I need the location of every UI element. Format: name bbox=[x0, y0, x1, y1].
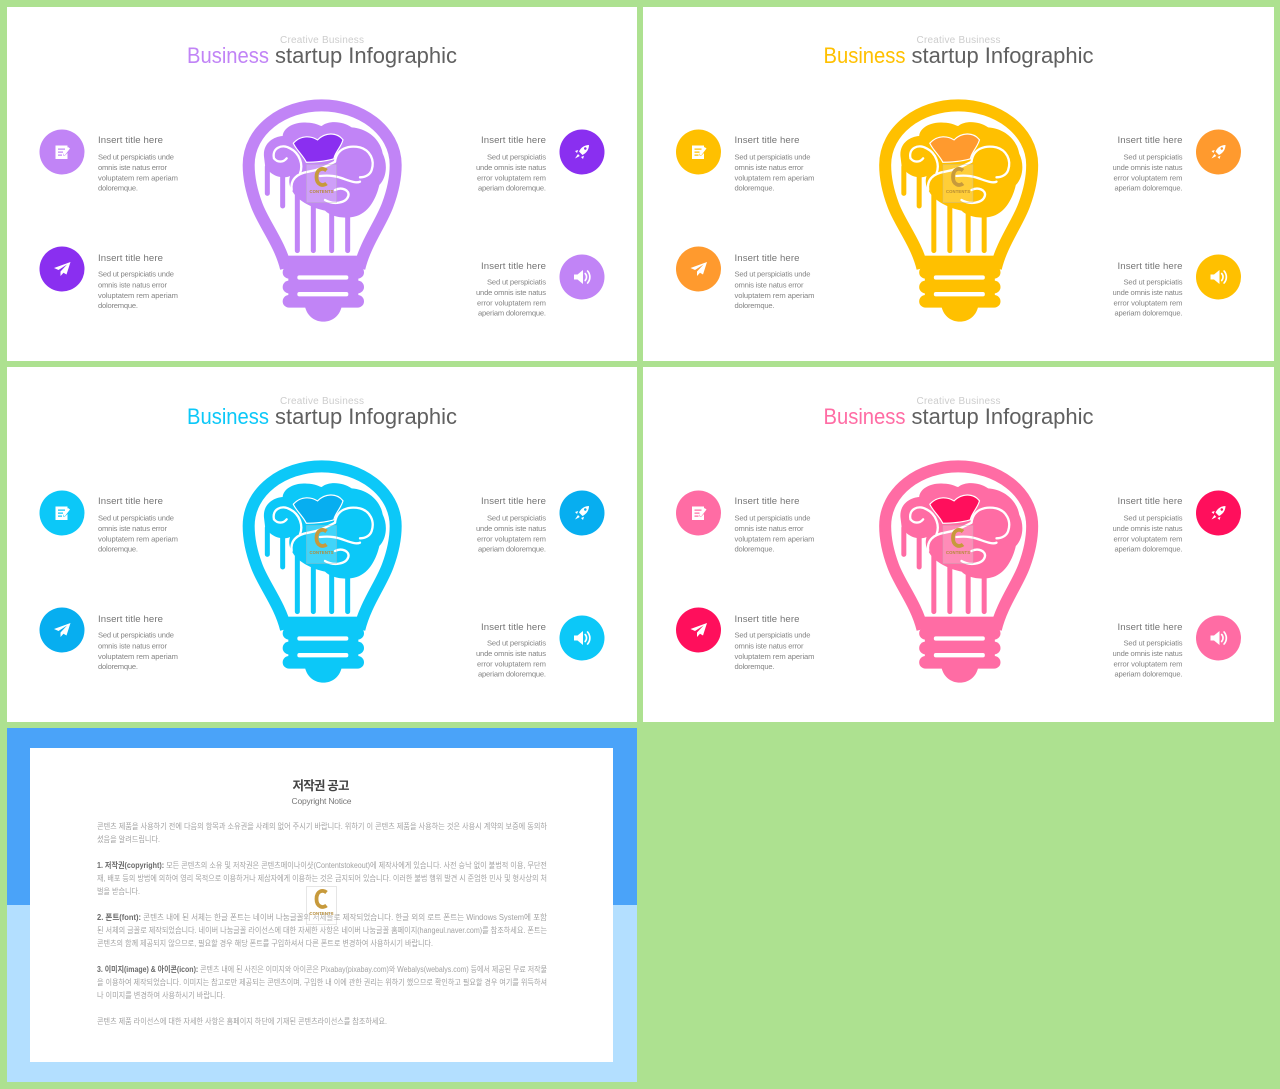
text block: top right: Sed ut perspiciatis bbox=[1124, 514, 1183, 522]
icon: note bbox=[40, 130, 84, 174]
text block: bottom left: omnis iste natus error bbox=[734, 642, 804, 650]
text block: top right: Sed ut perspiciatis bbox=[487, 514, 546, 522]
text block: bottom right bbox=[1112, 261, 1183, 318]
heading: Business bbox=[187, 404, 269, 429]
text block: bottom right: Sed ut perspiciatis bbox=[487, 638, 546, 648]
watermark logo bbox=[306, 164, 336, 202]
text block: bottom right: error voluptatem rem bbox=[477, 660, 546, 668]
text block: bottom left: Insert title here bbox=[98, 253, 163, 264]
icon: paper plane bbox=[676, 246, 721, 292]
overline: Creative Business bbox=[280, 396, 364, 407]
heading bbox=[187, 43, 457, 68]
notice intro: 셨음을 알려드립니다. bbox=[97, 834, 160, 844]
heading: Business bbox=[187, 43, 269, 68]
text block: top right: aperiam doloremque. bbox=[1114, 184, 1182, 192]
watermark logo: CONTENTS bbox=[946, 550, 970, 555]
notice section: font: 된 서체의 글꼴로 제작되었습니다. 네이버 나눔글꼴 라이선스에 대한 자세한 사항은 네이버 나눔글꼴 홈페이지(hangeul.naver.com)를 참조하세요. 폰트는 bbox=[97, 925, 547, 935]
icon: note bbox=[676, 490, 721, 536]
text block: bottom right: Insert title here bbox=[1118, 622, 1182, 633]
heading: startup Infographic bbox=[912, 404, 1094, 429]
text block: top left: Sed ut perspiciatis unde bbox=[734, 514, 810, 522]
text block: bottom left: voluptatem rem aperiam bbox=[734, 291, 814, 300]
text block: bottom left: Insert title here bbox=[98, 614, 163, 625]
icon: paper plane bbox=[40, 246, 84, 292]
text block: top left: doloremque. bbox=[98, 184, 138, 192]
watermark logo: CONTENTS bbox=[310, 189, 334, 194]
text block: bottom right: Sed ut perspiciatis bbox=[487, 278, 546, 286]
text block: bottom right: error voluptatem rem bbox=[1114, 660, 1182, 668]
text block: bottom right: Sed ut perspiciatis bbox=[1124, 638, 1183, 648]
text block: top left: voluptatem rem aperiam bbox=[734, 174, 814, 182]
text block: bottom left bbox=[734, 614, 814, 671]
icon: rocket bbox=[1196, 130, 1241, 174]
text block: bottom left: voluptatem rem aperiam bbox=[98, 291, 178, 300]
text block: top left bbox=[734, 135, 814, 192]
text block: top left: voluptatem rem aperiam bbox=[98, 534, 178, 544]
panel: pink slide bbox=[643, 367, 1274, 722]
text block: bottom right: unde omnis iste natus bbox=[476, 288, 546, 297]
notice section: copyright bbox=[97, 860, 547, 896]
notice section: font bbox=[97, 912, 548, 948]
icon: lightbulb with brain bbox=[249, 466, 396, 683]
text block: bottom left: omnis iste natus error bbox=[98, 280, 167, 290]
heading: startup Infographic bbox=[275, 404, 457, 429]
text block: bottom left: Insert title here bbox=[734, 614, 800, 625]
icon: speaker bbox=[1196, 254, 1241, 300]
heading: Business bbox=[824, 43, 906, 68]
panel: yellow slide bbox=[643, 7, 1274, 361]
text block: top right bbox=[476, 496, 546, 554]
text block: top left: Insert title here bbox=[734, 135, 800, 146]
notice intro: 콘텐츠 제품을 사용하기 전에 다음의 항목과 소유권을 사례의 없어 주시기 바랍니다. 위하기 이 콘텐츠 제품을 사용하는 것은 사용시 계약의 보증에 동의하 bbox=[97, 821, 548, 831]
text block: bottom right: Insert title here bbox=[481, 622, 546, 633]
watermark logo bbox=[306, 526, 336, 564]
notice footer: 콘텐츠 제품 라이선스에 대한 자세한 사항은 홈페이지 하단에 기재된 콘텐츠라이선스를 참조하세요. bbox=[97, 1016, 387, 1026]
heading: startup Infographic bbox=[275, 43, 457, 68]
icon: speaker bbox=[1196, 616, 1241, 660]
notice section: image and icon: 3. 이미지(image) & 아이콘(icon): 콘텐츠 내에 된 사진은 이미지와 아이콘은 Pixabay(pixabay.com)와 Webalys(webalys.com) 등에서 제공된 무료 저작물 bbox=[97, 964, 547, 974]
text block: top left: Sed ut perspiciatis unde bbox=[98, 514, 174, 522]
text block: top right: Insert title here bbox=[1118, 135, 1182, 146]
text block: bottom left: doloremque. bbox=[734, 301, 774, 310]
icon: rocket bbox=[560, 490, 604, 536]
text block: top right: aperiam doloremque. bbox=[478, 544, 546, 554]
text block: bottom left: omnis iste natus error bbox=[98, 642, 167, 650]
text block: bottom left: doloremque. bbox=[98, 301, 138, 310]
text block: top left bbox=[98, 496, 178, 554]
text block: top left bbox=[734, 496, 814, 554]
text block: bottom right: aperiam doloremque. bbox=[1114, 308, 1182, 318]
notice section: image and icon: 을 이용하여 제작되었습니다. 이미지는 참고로만 제공되는 콘텐츠이며, 구입한 내 이에 관한 권리는 위하기 했으므로 확인하고 필요할 경우 여기를 위득하셔 bbox=[97, 977, 547, 987]
watermark logo: CONTENTS bbox=[946, 189, 970, 194]
text block: bottom left: Sed ut perspiciatis unde bbox=[98, 630, 174, 640]
icon: note bbox=[676, 130, 721, 174]
text block: top left: doloremque. bbox=[734, 544, 774, 554]
icon: lightbulb with brain bbox=[885, 466, 1032, 683]
text block: top right: Insert title here bbox=[481, 496, 546, 507]
text block: bottom right: unde omnis iste natus bbox=[476, 649, 546, 658]
text block: top right bbox=[1112, 135, 1183, 192]
text block: bottom left bbox=[98, 253, 178, 310]
text block: top right bbox=[1112, 496, 1183, 554]
text block: top left: doloremque. bbox=[734, 184, 774, 192]
text block: top left: Insert title here bbox=[98, 496, 163, 507]
notice section: font: 2. 폰트(font): 콘텐츠 내에 된 서체는 한글 폰트는 네이버 나눔글꼴의 서체들로 제작되었습니다. 한글 외의 로트 폰트는 Windows System에 포함 bbox=[97, 912, 548, 922]
text block: top left: Insert title here bbox=[98, 135, 163, 146]
text block: bottom left: voluptatem rem aperiam bbox=[98, 652, 178, 661]
icon: lightbulb with brain bbox=[885, 105, 1032, 322]
notice section: copyright: 재, 배포 등의 방법에 의하여 영리 목적으로 이용하거나 제삼자에게 이용하는 것은 금지되어 있습니다. 이러한 불법 행위 발견 시 준엄한 민사 및 형사상의 처 bbox=[97, 873, 547, 883]
heading bbox=[187, 404, 457, 429]
text block: top right: aperiam doloremque. bbox=[1114, 544, 1182, 554]
text block: bottom left: doloremque. bbox=[734, 662, 774, 671]
text block: top right: Sed ut perspiciatis bbox=[1124, 152, 1183, 162]
text block: bottom right bbox=[476, 622, 546, 678]
text block: top left: omnis iste natus error bbox=[734, 163, 804, 172]
text block: bottom right: aperiam doloremque. bbox=[1114, 670, 1182, 678]
overline: Creative Business bbox=[916, 35, 1000, 46]
text block: bottom right: error voluptatem rem bbox=[1114, 298, 1182, 308]
watermark logo bbox=[306, 886, 336, 924]
text block: top left: doloremque. bbox=[98, 544, 138, 554]
icon: rocket bbox=[1196, 490, 1241, 536]
panel: copyright notice bbox=[7, 728, 637, 1082]
text block: top left: voluptatem rem aperiam bbox=[98, 174, 178, 182]
text block: top left: omnis iste natus error bbox=[98, 524, 167, 533]
text block: bottom left bbox=[734, 253, 814, 310]
text block: top right: unde omnis iste natus bbox=[1112, 524, 1183, 533]
text block: top right: Sed ut perspiciatis bbox=[487, 152, 546, 162]
text block: bottom left bbox=[98, 614, 178, 671]
text block: top right: error voluptatem rem bbox=[1114, 534, 1182, 544]
text block: bottom right bbox=[476, 261, 546, 318]
text block: bottom right: error voluptatem rem bbox=[477, 298, 546, 308]
text block: top right: unde omnis iste natus bbox=[476, 163, 546, 172]
heading bbox=[824, 404, 1094, 429]
text block: top right bbox=[476, 135, 546, 192]
text block: bottom left: Sed ut perspiciatis unde bbox=[734, 630, 810, 640]
icon: speaker bbox=[560, 616, 604, 660]
text block: top left: Sed ut perspiciatis unde bbox=[734, 152, 810, 162]
text block: top left: omnis iste natus error bbox=[98, 163, 167, 172]
text block: top left bbox=[98, 135, 178, 192]
notice title: 저작권 공고 bbox=[292, 778, 350, 793]
text block: bottom right: unde omnis iste natus bbox=[1112, 649, 1183, 658]
text block: top right: error voluptatem rem bbox=[477, 174, 546, 182]
icon: paper plane bbox=[40, 608, 84, 652]
text block: bottom right bbox=[1112, 622, 1183, 678]
text block: bottom right: Insert title here bbox=[1118, 261, 1182, 272]
text block: bottom right: unde omnis iste natus bbox=[1112, 288, 1183, 297]
notice intro bbox=[97, 821, 548, 844]
notice subtitle: Copyright Notice bbox=[292, 796, 352, 806]
text block: top right: unde omnis iste natus bbox=[1112, 163, 1183, 172]
watermark logo bbox=[943, 164, 973, 202]
text block: top right: Insert title here bbox=[481, 135, 546, 146]
notice section: font: 콘텐츠의 함께 제공되지 않으므로, 필요할 경우 해당 폰트를 구입하셔서 다른 폰트로 변경하여 사용하시기 바랍니다. bbox=[97, 938, 433, 948]
text block: bottom right: Sed ut perspiciatis bbox=[1124, 278, 1183, 286]
text block: top left: voluptatem rem aperiam bbox=[734, 534, 814, 544]
text block: bottom right: aperiam doloremque. bbox=[478, 308, 546, 318]
text block: bottom left: Sed ut perspiciatis unde bbox=[98, 270, 174, 278]
text block: bottom right: Insert title here bbox=[481, 261, 546, 272]
text block: top right: aperiam doloremque. bbox=[478, 184, 546, 192]
watermark logo: CONTENTS bbox=[310, 550, 334, 555]
text block: top left: Sed ut perspiciatis unde bbox=[98, 152, 174, 162]
text block: top right: error voluptatem rem bbox=[477, 534, 546, 544]
text block: bottom left: omnis iste natus error bbox=[734, 280, 804, 290]
notice section: image and icon: 나 이미지를 변경하여 사용하시기 바랍니다. bbox=[97, 990, 225, 1000]
icon: lightbulb with brain bbox=[249, 105, 396, 322]
text block: top left: omnis iste natus error bbox=[734, 524, 804, 533]
heading: startup Infographic bbox=[912, 43, 1094, 68]
watermark logo: CONTENTS bbox=[310, 911, 334, 916]
text block: top left: Insert title here bbox=[734, 496, 800, 507]
overline: Creative Business bbox=[916, 396, 1000, 407]
icon: speaker bbox=[560, 254, 604, 300]
icon: paper plane bbox=[676, 608, 721, 652]
heading bbox=[824, 43, 1094, 68]
text block: bottom left: voluptatem rem aperiam bbox=[734, 652, 814, 661]
icon: note bbox=[40, 490, 84, 536]
notice section: copyright: 1. 저작권(copyright): 모든 콘텐츠의 소유 및 저작권은 콘텐츠메이나이샷(Contentstokeout)에 제작사에게 있습니다. 사전 승낙 없이 불법적 이용, 무단전 bbox=[97, 860, 547, 870]
watermark logo bbox=[943, 526, 973, 564]
notice section: copyright: 벌을 받습니다. bbox=[97, 886, 140, 896]
heading: Business bbox=[824, 404, 906, 429]
text block: top right: Insert title here bbox=[1118, 496, 1182, 507]
text block: bottom right: aperiam doloremque. bbox=[478, 670, 546, 678]
panel: blue slide bbox=[7, 367, 637, 722]
notice section: image and icon bbox=[97, 964, 547, 1000]
overline: Creative Business bbox=[280, 35, 364, 46]
text block: bottom left: Sed ut perspiciatis unde bbox=[734, 270, 810, 278]
text block: bottom left: Insert title here bbox=[734, 253, 800, 264]
text block: top right: unde omnis iste natus bbox=[476, 524, 546, 533]
icon: rocket bbox=[560, 130, 604, 174]
text block: top right: error voluptatem rem bbox=[1114, 174, 1182, 182]
text block: bottom left: doloremque. bbox=[98, 662, 138, 671]
panel: purple slide bbox=[7, 7, 637, 361]
